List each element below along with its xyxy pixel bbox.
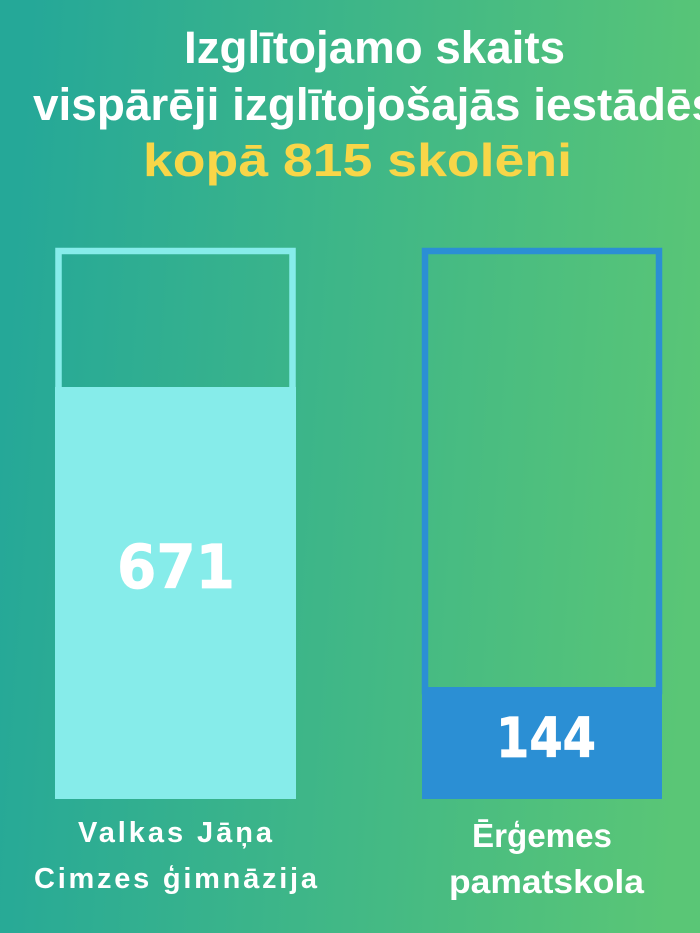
title line 1: Izglītojamo skaits <box>184 22 565 73</box>
label: Valkas Jāņa Cimzes ģimnāzija <box>34 817 318 895</box>
title highlight: total pupils: kopā 815 skolēni <box>143 134 572 186</box>
label: Ērģemes pamatskola <box>449 817 645 900</box>
label: Valkas Jāņa Cimzes ģimnāzija: Valkas Jāņa <box>78 817 273 849</box>
label: Ērģemes pamatskola: Ērģemes <box>472 817 612 854</box>
value 671: 671 <box>117 532 235 603</box>
label: Valkas Jāņa Cimzes ģimnāzija: Cimzes ģimnāzija <box>34 863 318 895</box>
value 144: 144 <box>496 706 596 770</box>
bar fill <box>422 687 662 799</box>
bar outline <box>425 251 659 691</box>
bar: Valkas Jāņa Cimzes ģimnāzija <box>55 251 296 799</box>
label: Ērģemes pamatskola: pamatskola <box>449 863 645 900</box>
title <box>33 22 700 186</box>
bar outline <box>58 251 292 391</box>
title line 2: vispārēji izglītojošajās iestādēs <box>33 79 700 130</box>
bar fill <box>55 387 296 799</box>
bar: Ērģemes pamatskola <box>422 251 662 799</box>
